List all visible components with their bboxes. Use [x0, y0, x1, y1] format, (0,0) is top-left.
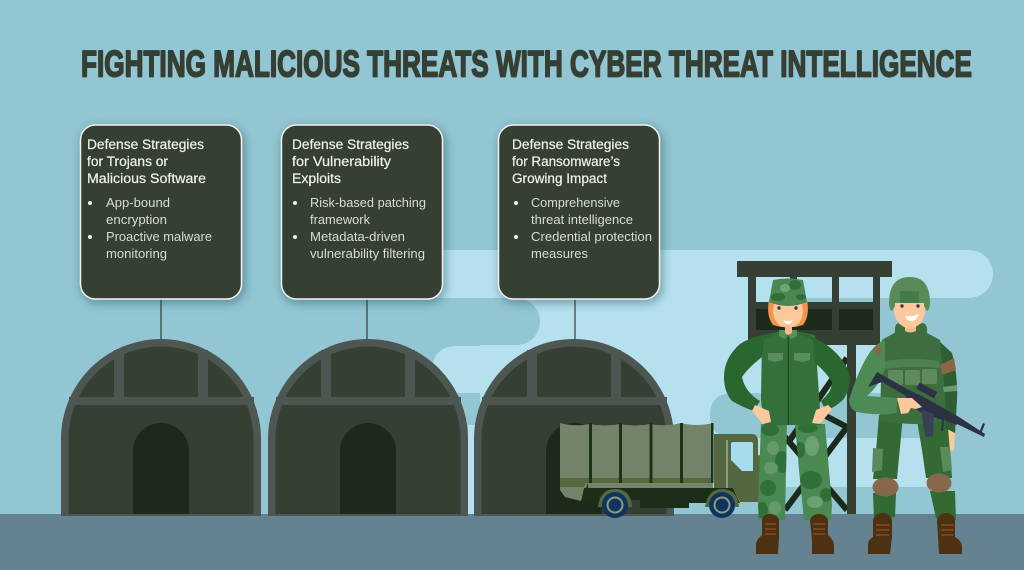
hangar 1 — [61, 339, 261, 516]
heading: vulnerability exploits: for Vulnerability — [292, 154, 391, 169]
hands — [752, 405, 771, 424]
heading: ransomware: for Ransomware’s — [512, 154, 620, 169]
watch tower — [737, 261, 892, 514]
list: trojans: Proactive malware — [106, 229, 212, 244]
list: trojans — [88, 195, 212, 261]
panel: vulnerability exploits — [282, 125, 442, 299]
list: vulnerability exploits: framework — [310, 212, 370, 227]
heading: ransomware: Growing Impact — [512, 171, 607, 186]
panel: ransomware — [498, 125, 660, 299]
legs — [873, 415, 952, 479]
right arm — [938, 340, 957, 433]
list: ransomware — [514, 195, 652, 261]
list: vulnerability exploits: Metadata-driven — [310, 229, 405, 244]
trousers — [756, 423, 832, 520]
truck cab — [714, 434, 764, 502]
hair — [768, 300, 808, 327]
left arm — [849, 340, 897, 414]
left sleeve — [724, 332, 778, 411]
list: ransomware: Comprehensive — [531, 195, 620, 210]
heading: ransomware: Defense Strategies — [512, 137, 629, 152]
heading: trojans — [87, 137, 206, 186]
heading: trojans: Malicious Software — [87, 171, 206, 186]
hangar 2 — [268, 339, 468, 516]
truck chassis — [581, 488, 740, 508]
boots — [868, 513, 962, 554]
soldier: woman with cap — [724, 278, 850, 554]
heading: vulnerability exploits: Exploits — [292, 171, 341, 186]
rifle — [868, 372, 985, 437]
heading: trojans: for Trojans or — [87, 154, 169, 169]
list: ransomware: measures — [531, 246, 588, 261]
right sleeve — [797, 332, 850, 411]
pockets and collar — [768, 330, 810, 362]
right wrist — [947, 430, 955, 452]
truck wheels — [598, 489, 739, 518]
military truck — [560, 423, 764, 518]
camouflage cap — [769, 278, 807, 306]
list: trojans: App-bound — [106, 195, 170, 210]
list: vulnerability exploits: Risk-based patching — [310, 195, 426, 210]
list: trojans: monitoring — [106, 246, 167, 261]
neck and face — [894, 302, 925, 332]
knee pads — [872, 474, 952, 496]
vest — [884, 359, 940, 385]
eyes and smile — [777, 306, 798, 324]
arm patches — [940, 358, 956, 375]
heading: trojans: Defense Strategies — [87, 137, 204, 152]
placket — [788, 337, 789, 425]
neck — [785, 326, 792, 335]
list: trojans: encryption — [106, 212, 167, 227]
truck cargo cover — [560, 423, 714, 501]
heading: ransomware — [512, 137, 629, 186]
soldier: man with rifle — [849, 277, 985, 554]
boots — [756, 514, 834, 554]
jacket — [761, 331, 821, 425]
face — [773, 302, 803, 328]
heading: vulnerability exploits: Defense Strategies — [292, 137, 409, 152]
helmet — [889, 277, 930, 311]
shoulder patch — [873, 345, 882, 355]
list: vulnerability exploits: vulnerability filtering — [310, 246, 425, 261]
background clouds — [340, 250, 1024, 515]
collar — [895, 323, 927, 338]
heading: vulnerability exploits — [292, 137, 409, 186]
panel: trojans — [80, 125, 242, 299]
ground — [0, 514, 1024, 570]
connector lines — [161, 298, 575, 340]
list: vulnerability exploits — [293, 195, 426, 261]
list: ransomware: Credential protection — [531, 229, 652, 244]
hangar 3 — [474, 339, 674, 516]
thigh pouches — [872, 447, 952, 472]
hand on rifle — [897, 398, 922, 414]
torso — [880, 332, 946, 424]
list: ransomware: threat intelligence — [531, 212, 633, 227]
